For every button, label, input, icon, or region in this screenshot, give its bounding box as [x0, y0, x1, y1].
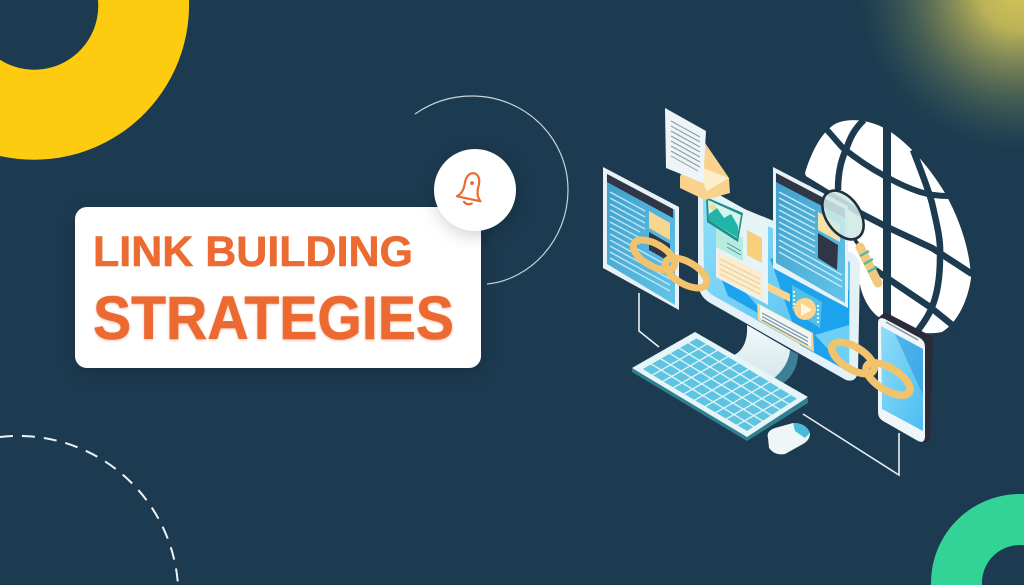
- globe: [803, 120, 972, 333]
- title line 2: STRATEGIES: [93, 284, 454, 352]
- left browser window: [603, 167, 679, 310]
- left chain: [629, 234, 711, 294]
- dashed arc: [0, 436, 178, 585]
- monitor: [698, 190, 860, 381]
- yellow corner glow: [844, 0, 1024, 165]
- right browser window: [773, 167, 848, 308]
- image thumbnail: [706, 197, 743, 242]
- text block: [718, 252, 763, 298]
- title card: [75, 207, 481, 368]
- document: [665, 108, 730, 200]
- mouse: [768, 423, 810, 454]
- keyboard: [632, 332, 808, 441]
- green ring: [931, 494, 1024, 585]
- monitor stand: [732, 325, 790, 384]
- yellow ring: [0, 0, 189, 160]
- connector lines: [639, 293, 899, 475]
- right chain: [827, 336, 915, 402]
- phone: [878, 312, 933, 443]
- title line 1: LINK BUILDING: [93, 228, 413, 276]
- icon: bell badge: [434, 149, 516, 231]
- thin arc: [415, 96, 568, 284]
- video card: [757, 283, 822, 352]
- monitor content card: [716, 193, 768, 305]
- illustration: isometric devices: [603, 108, 972, 475]
- yellow block: [747, 230, 762, 263]
- magnifier: [814, 183, 878, 283]
